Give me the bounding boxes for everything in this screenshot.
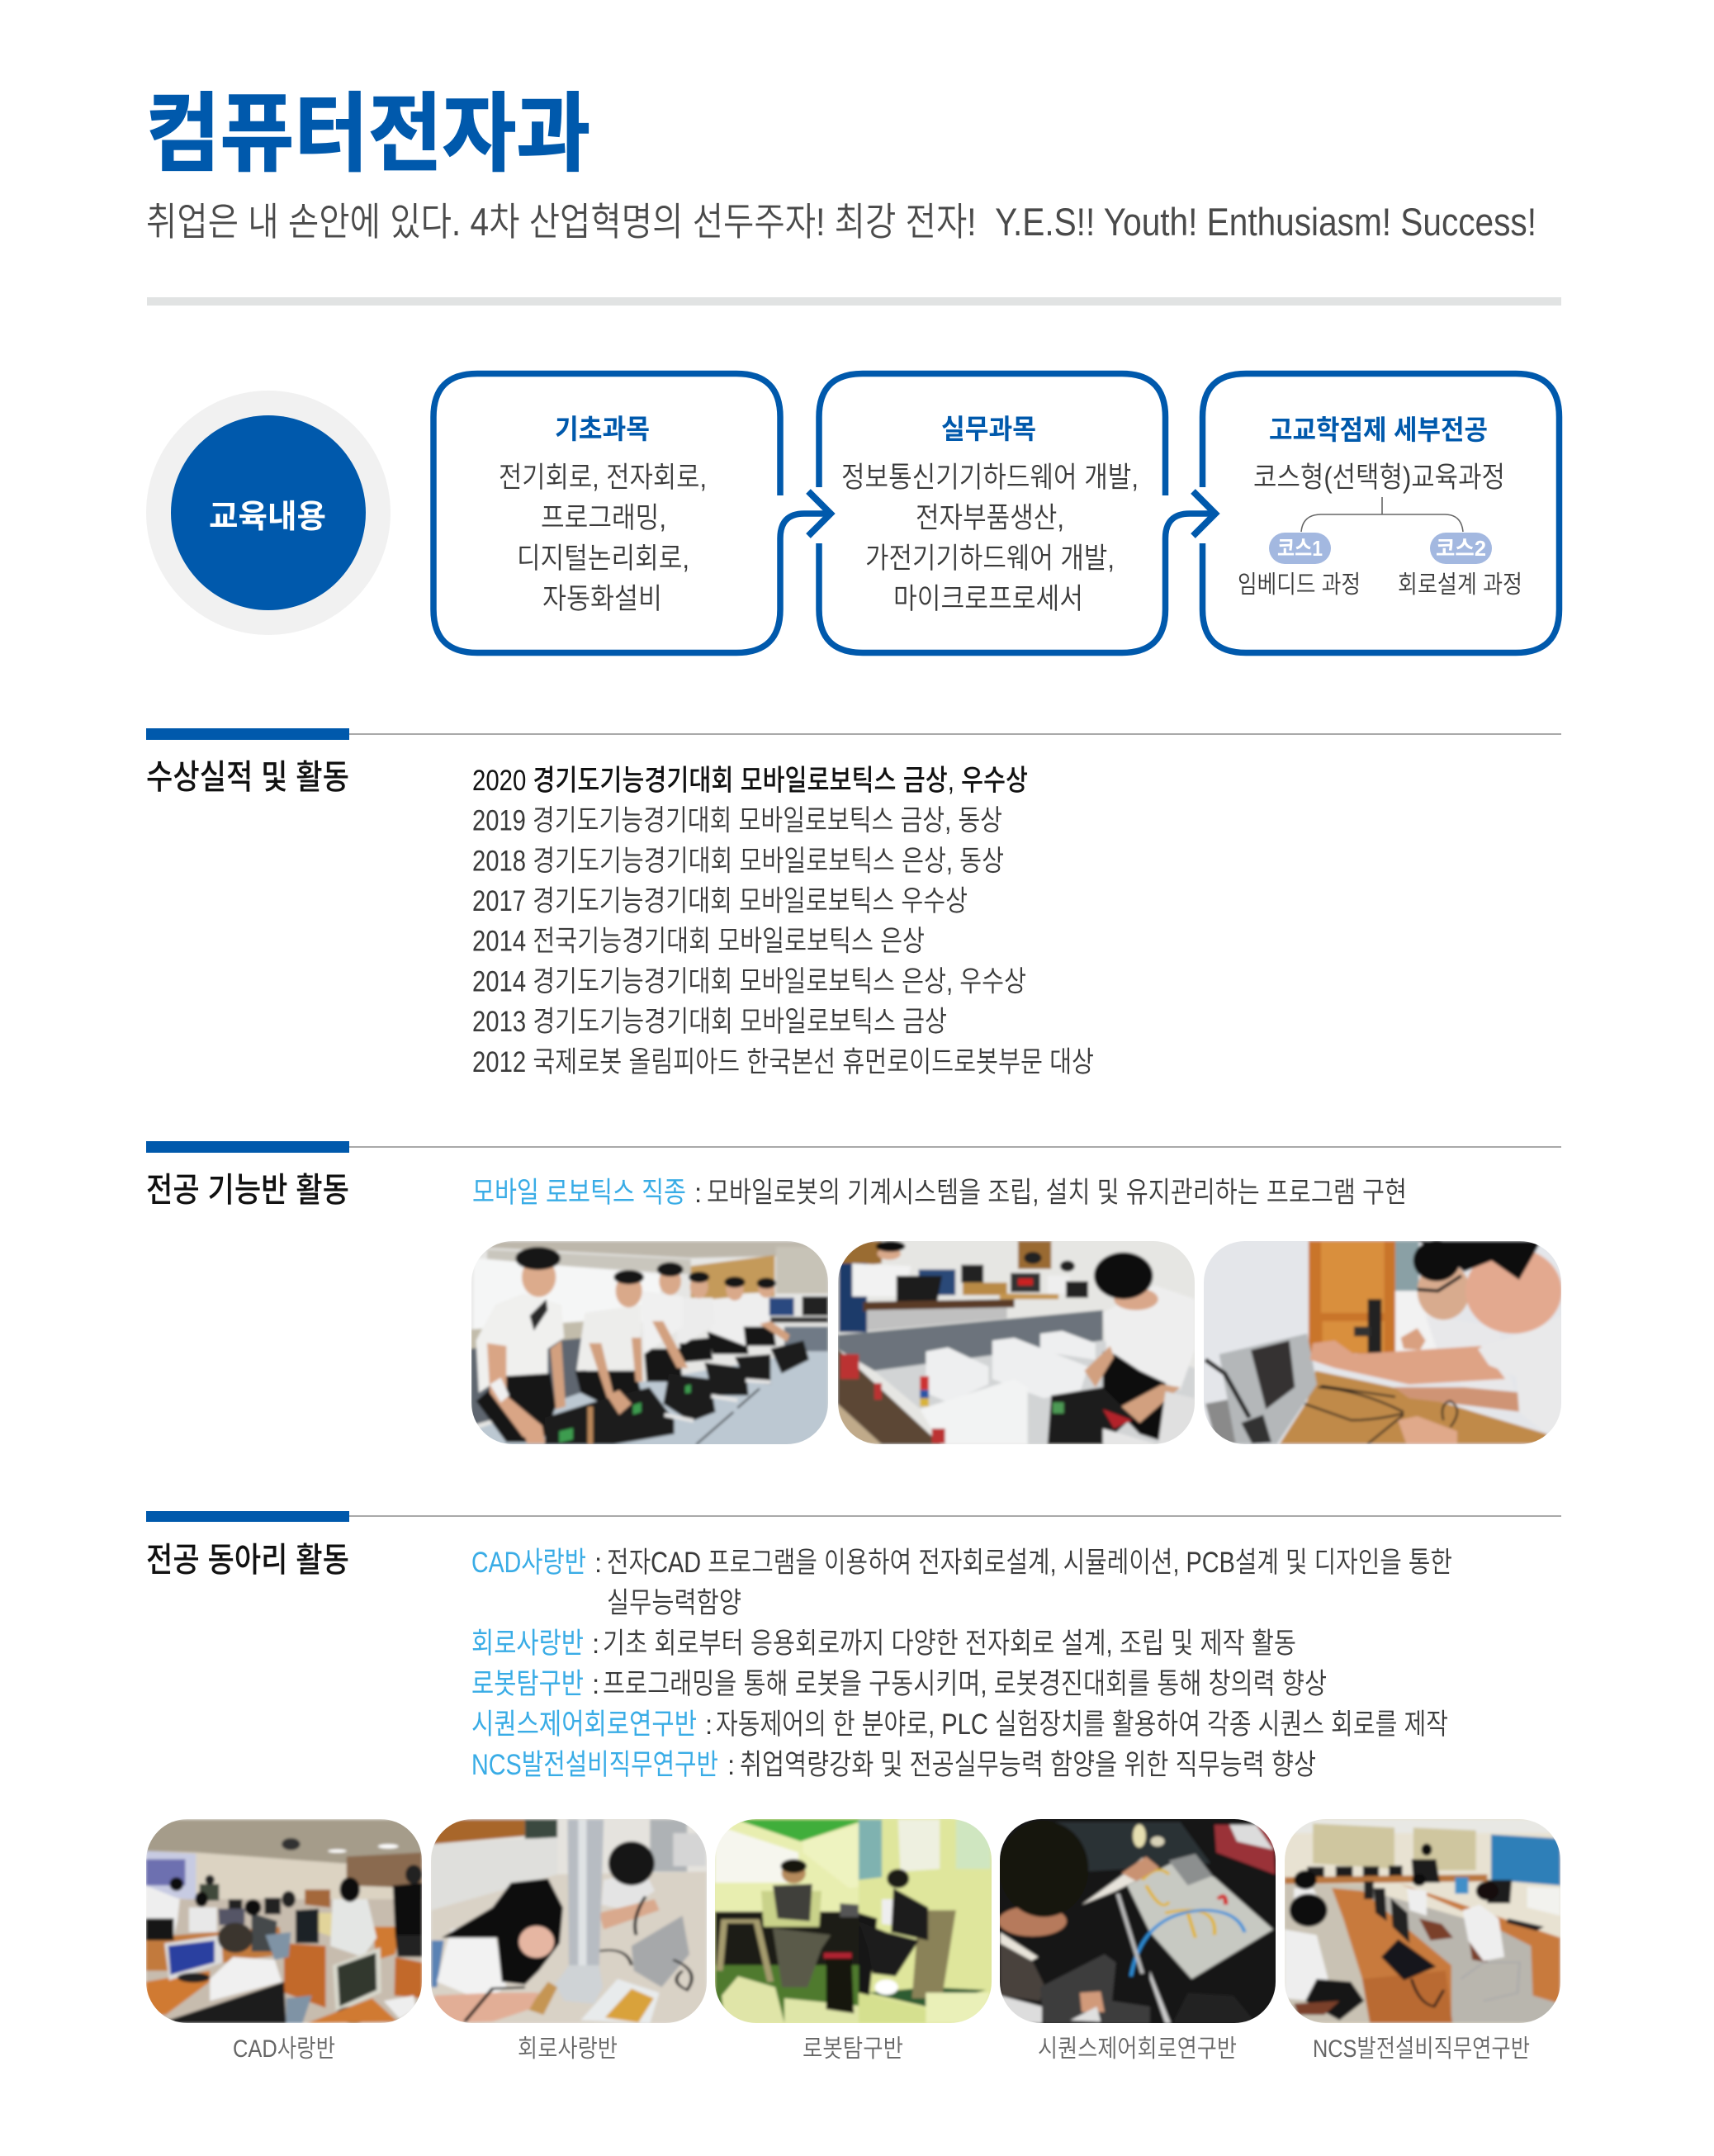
skill team description: [472, 1177, 1407, 1209]
clubs description: 프로그래밍을 통해 로봇을 구동시키며, 로봇경진대회를 통해 창의력 향상: [603, 1668, 1327, 1700]
clubs description: 취업역량강화 및 전공실무능력 함양을 위한 직무능력 향상: [740, 1749, 1316, 1781]
course 2 pill: [1430, 533, 1492, 564]
box: practical courses with arrow: 가전기기하드웨어 개발,: [865, 543, 1115, 575]
clubs description: 회로사랑반: [471, 1628, 584, 1660]
awards list: 2020 경기도기능경기대회 모바일로보틱스 금상, 우수상: [472, 765, 1028, 797]
clubs description: 기초 회로부터 응용회로까지 다양한 전자회로 설계, 조립 및 제작 활동: [603, 1628, 1296, 1660]
photo: circuit club: [428, 1817, 710, 2026]
skill team description: 모바일로봇의 기계시스템을 조립, 설치 및 유지관리하는 프로그램 구현: [707, 1177, 1407, 1209]
course tree connector: [1301, 497, 1463, 532]
clubs description: 로봇탐구반: [471, 1668, 584, 1700]
awards list: 2019 경기도기능경기대회 모바일로보틱스 금상, 동상: [472, 804, 1002, 837]
awards list: 2017 경기도기능경기대회 모바일로보틱스 우수상: [472, 885, 968, 917]
heading: awards: 수상실적 및 활동: [146, 758, 349, 796]
box: school credit major: 회로설계 과정: [1398, 571, 1522, 599]
photo: sequence control club: [991, 1817, 1283, 2026]
photo: students with robots: [471, 1239, 842, 1449]
caption: robot club: 로봇탐구반: [803, 2035, 903, 2063]
course 2 pill: 코스2: [1436, 536, 1486, 561]
box: basic courses with arrow: 기초과목: [555, 414, 650, 444]
awards list: 2012 국제로봇 올림피아드 한국본선 휴먼로이드로봇부문 대상: [472, 1046, 1094, 1078]
box: practical courses with arrow: 정보통신기기하드웨어 개발,: [841, 462, 1139, 494]
clubs description: :: [705, 1709, 713, 1740]
box: basic courses with arrow: [433, 373, 831, 652]
panel: curriculum: [146, 373, 1559, 652]
clubs description: :: [594, 1547, 602, 1578]
awards list: [472, 765, 1094, 1078]
awards list: 2013 경기도기능경기대회 모바일로보틱스 금상: [472, 1006, 947, 1038]
course 1 pill: 코스1: [1277, 536, 1323, 561]
skill team description: 모바일 로보틱스 직종: [472, 1177, 686, 1209]
clubs description: 시퀀스제어회로연구반: [471, 1708, 697, 1741]
caption: CAD club: CAD사랑반: [233, 2035, 335, 2063]
section rule: skill team: [146, 1141, 1561, 1153]
clubs description: 전자CAD 프로그램을 이용하여 전자회로설계, 시뮬레이션, PCB설계 및 디자인을 통한: [607, 1547, 1452, 1579]
awards list: 2014 전국기능경기대회 모바일로보틱스 은상: [472, 925, 925, 958]
box: school credit major: 고교학점제 세부전공: [1269, 415, 1488, 445]
photo: student with maze robot: [838, 1241, 1195, 1444]
title: 컴퓨터전자과: [146, 87, 590, 182]
clubs description: 자동제어의 한 분야로, PLC 실험장치를 활용하여 각종 시퀀스 회로를 제작: [716, 1708, 1448, 1741]
caption: NCS club: NCS발전설비직무연구반: [1313, 2035, 1530, 2063]
clubs description: NCS발전설비직무연구반: [471, 1749, 718, 1781]
clubs description: 실무능력함양: [607, 1587, 741, 1619]
clubs description: :: [727, 1750, 735, 1780]
badge: curriculum circle: [146, 391, 391, 635]
awards list: 2014 경기도기능경기대회 모바일로보틱스 은상, 우수상: [472, 966, 1026, 997]
photo: students with oscilloscope: [1204, 1241, 1561, 1444]
badge: curriculum circle: 교육내용: [209, 500, 326, 535]
caption: circuit club: 회로사랑반: [518, 2035, 618, 2063]
photo: robot club: [710, 1817, 995, 2027]
section rule: awards: [146, 728, 1561, 740]
section rule: clubs: [146, 1511, 1561, 1522]
box: basic courses with arrow: 디지털논리회로,: [517, 543, 689, 575]
course 1 pill: [1269, 533, 1331, 564]
clubs description: :: [592, 1628, 599, 1659]
box: basic courses with arrow: 자동화설비: [542, 583, 662, 615]
box: basic courses with arrow: 전기회로, 전자회로,: [499, 462, 707, 494]
box: practical courses with arrow: [819, 373, 1215, 652]
heading: skill team: 전공 기능반 활동: [146, 1171, 349, 1209]
clubs description: :: [592, 1669, 599, 1699]
box: practical courses with arrow: 전자부품생산,: [916, 502, 1064, 534]
box: practical courses with arrow: 마이크로프로세서: [893, 583, 1083, 615]
subtitle: 취업은 내 손안에 있다. 4차 산업혁명의 선두주자! 최강 전자! Y.E.S!! Youth! Enthusiasm! Success!: [146, 200, 1536, 244]
heading: clubs: 전공 동아리 활동: [146, 1541, 349, 1579]
clubs description: [471, 1547, 1452, 1781]
caption: sequence control club: 시퀀스제어회로연구반: [1038, 2035, 1237, 2063]
skill team description: :: [694, 1178, 702, 1208]
box: school credit major: [1202, 373, 1559, 652]
box: basic courses with arrow: 프로그래밍,: [541, 502, 666, 534]
awards list: 2018 경기도기능경기대회 모바일로보틱스 은상, 동상: [472, 846, 1004, 877]
box: practical courses with arrow: 실무과목: [941, 414, 1036, 444]
photo: NCS club: [1283, 1817, 1563, 2026]
box: school credit major: 임베디드 과정: [1238, 571, 1361, 599]
photo: CAD club: [146, 1819, 422, 2023]
box: school credit major: 코스형(선택형)교육과정: [1253, 462, 1505, 494]
clubs description: CAD사랑반: [471, 1547, 586, 1579]
